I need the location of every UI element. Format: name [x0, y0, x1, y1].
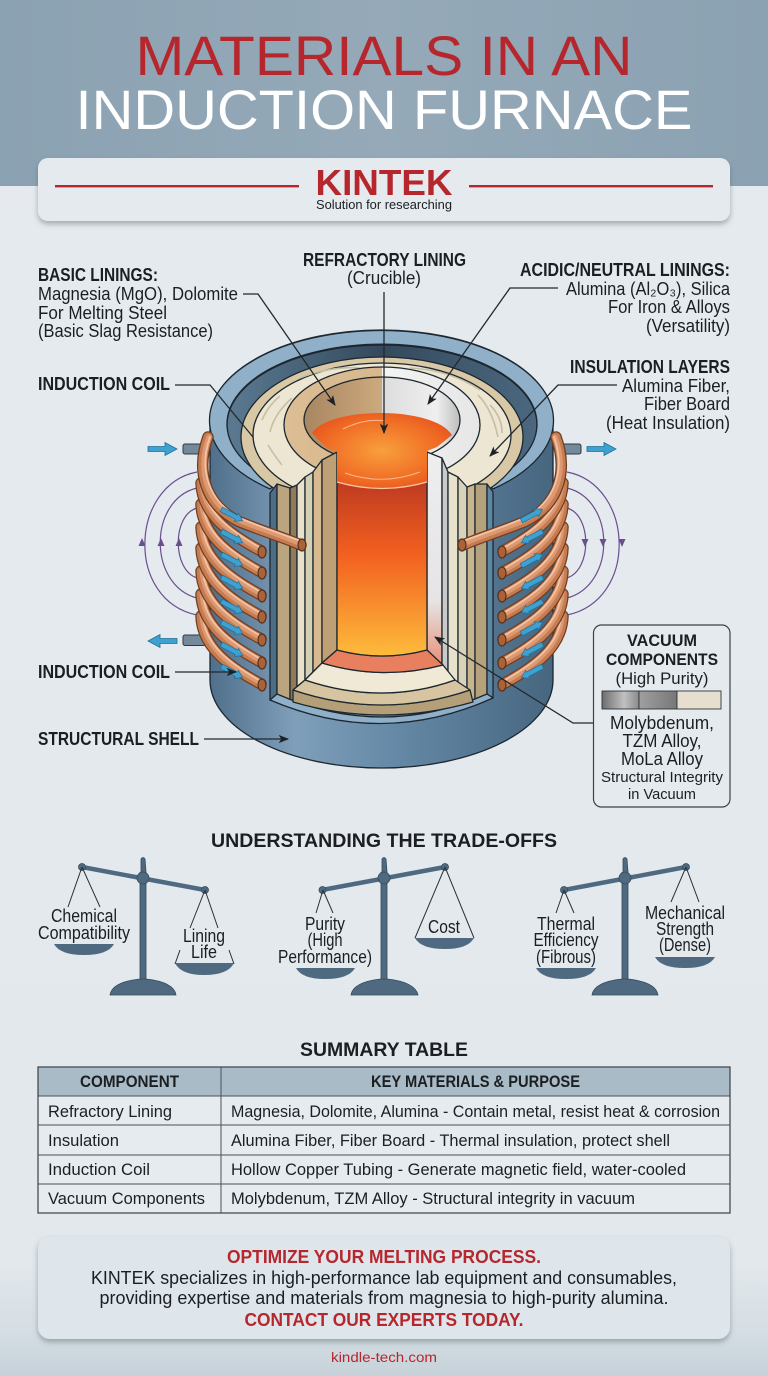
- label: induction coil lower: INDUCTION COIL: [38, 662, 170, 682]
- label: acidic neutral linings: [520, 260, 731, 336]
- title: [76, 24, 692, 141]
- scale: chemical compatibility vs lining life: Life: [191, 942, 217, 962]
- panel: vacuum components: MoLa Alloy: [621, 749, 703, 769]
- summary table: KEY MATERIALS & PURPOSE: [371, 1072, 580, 1091]
- copper coil left tube ends: [258, 539, 306, 691]
- water flow arrows on coils: [219, 505, 545, 682]
- insulation board ring: [241, 357, 523, 517]
- scale: chemical compatibility vs lining life: Compatibility: [38, 923, 130, 943]
- summary table: Alumina Fiber, Fiber Board - Thermal insulation, protect shell: [231, 1131, 670, 1150]
- copper coil right tube ends: [458, 539, 506, 691]
- summary table: Molybdenum, TZM Alloy - Structural integrity in vacuum: [231, 1189, 635, 1208]
- label: acidic neutral linings: ACIDIC/NEUTRAL LININGS:: [520, 260, 730, 280]
- crucible floor layers: [270, 650, 493, 724]
- title: MATERIALS IN AN: [136, 24, 632, 87]
- copper coil left: [201, 437, 301, 684]
- cut face strips left: [270, 452, 337, 702]
- panel: KINTEK brand card: KINTEK: [316, 162, 452, 203]
- shell inner wall: [227, 345, 537, 505]
- scale: thermal efficiency vs mechanical strength: (Dense): [659, 935, 711, 955]
- scale: thermal efficiency vs mechanical strength: Strength: [656, 919, 714, 939]
- panel: vacuum components: in Vacuum: [628, 786, 696, 803]
- summary table: Insulation: [48, 1131, 119, 1150]
- refractory ring: [284, 367, 480, 483]
- scale: purity vs cost: Performance): [278, 947, 372, 967]
- summary table: Induction Coil: [48, 1160, 150, 1179]
- label: acidic neutral linings: (Versatility): [646, 316, 730, 336]
- panel: vacuum components: [594, 625, 730, 807]
- summary table: Magnesia, Dolomite, Alumina - Contain metal, resist heat & corrosion: [231, 1102, 720, 1121]
- panel: KINTEK brand card: Solution for researching: [316, 198, 452, 212]
- diagram: furnace cutaway: [138, 330, 626, 768]
- scale: purity vs cost: (High: [308, 930, 342, 950]
- molten metal column: [337, 452, 427, 656]
- label: refractory lining: REFRACTORY LINING: [303, 250, 466, 270]
- label: basic linings: For Melting Steel: [38, 303, 167, 323]
- scale: chemical compatibility vs lining life: Lining: [183, 926, 225, 946]
- label: insulation layers: (Heat Insulation): [606, 413, 730, 433]
- scale: thermal efficiency vs mechanical strength: (Fibrous): [536, 947, 596, 967]
- panel: vacuum components: (High Purity): [616, 669, 708, 688]
- shell top rim: [210, 330, 554, 489]
- panel: KINTEK brand card: [38, 158, 730, 221]
- heading: trade-offs: UNDERSTANDING THE TRADE-OFFS: [211, 830, 557, 852]
- scale: thermal efficiency vs mechanical strength: Mechanical: [645, 903, 725, 923]
- label: basic linings: Magnesia (MgO), Dolomite: [38, 284, 238, 304]
- material colour swatch: [602, 691, 721, 709]
- panel: vacuum components: Molybdenum,: [610, 713, 714, 733]
- label: insulation layers: Alumina Fiber,: [622, 376, 730, 396]
- summary table: COMPONENT: [80, 1072, 180, 1091]
- crucible inner wall: [304, 377, 460, 463]
- leader lines and arrows: [175, 288, 617, 739]
- coolant pipes and flow arrows: [148, 442, 616, 648]
- title: INDUCTION FURNACE: [76, 78, 692, 141]
- panel: call to action: CONTACT OUR EXPERTS TODAY.: [244, 1310, 524, 1330]
- copper coil right: [463, 437, 563, 684]
- scale: chemical compatibility vs lining life: [38, 858, 234, 995]
- panel: call to action: [38, 1237, 730, 1339]
- panel: vacuum components: VACUUM: [627, 631, 697, 650]
- structural shell body: [210, 330, 553, 768]
- label: basic linings: [38, 265, 238, 341]
- scale: thermal efficiency vs mechanical strength: [534, 858, 725, 995]
- summary table: Vacuum Components: [48, 1189, 205, 1208]
- molten metal surface: [312, 413, 452, 488]
- magnetic field lines: [138, 472, 626, 615]
- scale: purity vs cost: [278, 858, 474, 995]
- summary table: Refractory Lining: [48, 1102, 172, 1121]
- label: acidic neutral linings: Alumina (Al₂O₃), Silica: [566, 279, 731, 299]
- scale: purity vs cost: Cost: [428, 917, 460, 937]
- cut face strips right: [427, 452, 493, 702]
- panel: call to action: providing expertise and materials from magnesia to high-purity alumina.: [100, 1288, 668, 1308]
- footer url: kindle-tech.com: [331, 1350, 437, 1365]
- panel: vacuum components: Structural Integrity: [601, 769, 723, 786]
- header band: [0, 0, 768, 186]
- summary table: Hollow Copper Tubing - Generate magnetic field, water-cooled: [231, 1160, 686, 1179]
- label: refractory lining: [303, 250, 466, 288]
- heading: summary table: SUMMARY TABLE: [300, 1039, 468, 1061]
- panel: vacuum components: TZM Alloy,: [622, 731, 702, 751]
- label: insulation layers: INSULATION LAYERS: [570, 357, 730, 377]
- label: refractory lining: (Crucible): [347, 268, 421, 288]
- scale: thermal efficiency vs mechanical strength: Efficiency: [534, 930, 598, 950]
- panel: call to action: KINTEK specializes in high-performance lab equipment and consumables,: [91, 1268, 677, 1288]
- alumina fiber ring: [253, 363, 511, 507]
- label: induction coil upper: INDUCTION COIL: [38, 374, 170, 394]
- label: structural shell: STRUCTURAL SHELL: [38, 729, 199, 749]
- summary table: [38, 1067, 730, 1213]
- panel: vacuum components: COMPONENTS: [606, 650, 718, 669]
- label: insulation layers: [570, 357, 730, 433]
- scale: purity vs cost: Purity: [305, 914, 345, 934]
- label: insulation layers: Fiber Board: [644, 394, 730, 414]
- scale: chemical compatibility vs lining life: Chemical: [51, 906, 117, 926]
- label: basic linings: BASIC LININGS:: [38, 265, 158, 285]
- scale: thermal efficiency vs mechanical strength: Thermal: [537, 914, 595, 934]
- panel: call to action: OPTIMIZE YOUR MELTING PROCESS.: [227, 1247, 541, 1267]
- label: basic linings: (Basic Slag Resistance): [38, 321, 213, 341]
- label: acidic neutral linings: For Iron & Alloys: [608, 297, 730, 317]
